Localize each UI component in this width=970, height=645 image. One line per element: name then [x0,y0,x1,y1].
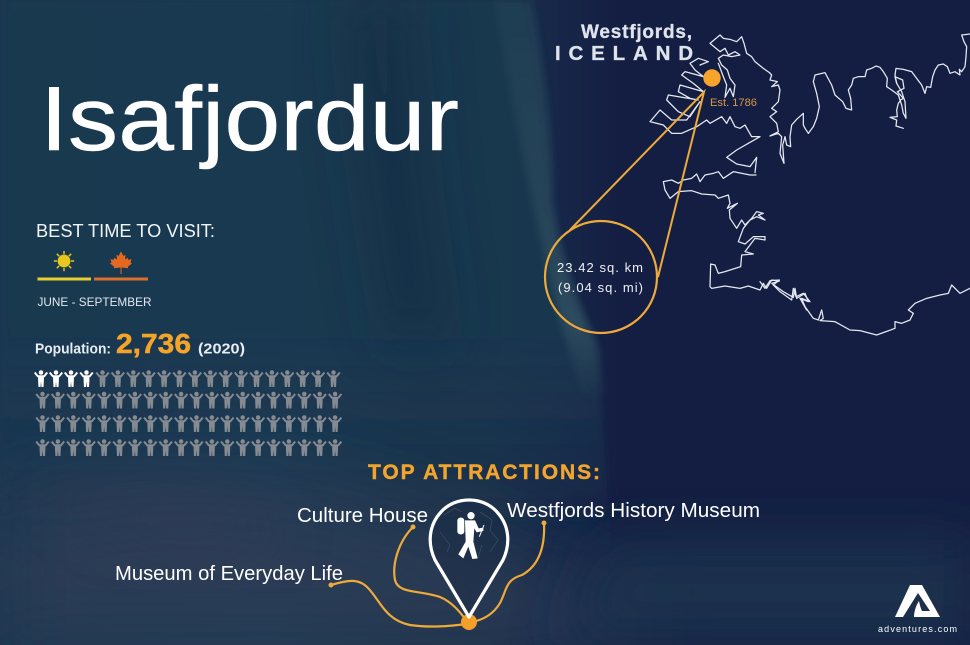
map marker: Isafjordur [703,69,721,87]
callout: town area: (9.04 sq. mi) [558,280,643,295]
season bar: autumn [94,278,148,280]
map label: Westfjords, Iceland: Westfjords, [581,22,692,43]
title: Isafjordur [40,69,459,170]
pictogram: people [35,370,341,456]
population number: 2,736 [116,328,191,359]
logo mark [895,585,940,617]
logo wordmark: adventures.com [878,624,957,634]
connector: Culture House [394,527,466,620]
label: Culture House: Culture House [297,505,428,527]
months label: JUNE - SEPTEMBER [38,295,152,309]
label: Museum of Everyday Life: Museum of Everyday Life [115,563,343,585]
connector: Museum of Everyday Life [331,581,467,627]
icon: maple leaf [110,252,132,274]
heading: top attractions: TOP ATTRACTIONS: [368,461,600,484]
map pin [430,500,508,617]
icon: sun [54,252,74,270]
callout pointer [570,92,704,277]
population panel [35,328,341,456]
map: Iceland coastline [650,34,970,335]
callout circle [545,221,657,333]
founded label: Est. 1786 [710,97,757,109]
pin world map [440,508,498,558]
label: Westfjords History Museum: Westfjords History Museum [507,500,760,522]
season bar: summer [38,278,91,280]
best time to visit panel [36,221,215,309]
map label: Westfjords, Iceland: ICELAND [555,42,693,65]
area text: 23.42 sq. km [557,260,643,275]
attraction hub dot [461,614,477,630]
population label: Population: [35,342,111,358]
map label: Westfjords, Iceland [555,22,693,65]
heading: best time to visit: BEST TIME TO VISIT: [36,221,215,241]
logo: adventures.com [878,585,957,634]
callout: town area [545,92,704,333]
population year: (2020) [198,342,245,358]
icon: hiker [457,512,484,559]
connector: Westfjords History Museum [472,523,544,622]
attractions diagram [115,500,760,630]
